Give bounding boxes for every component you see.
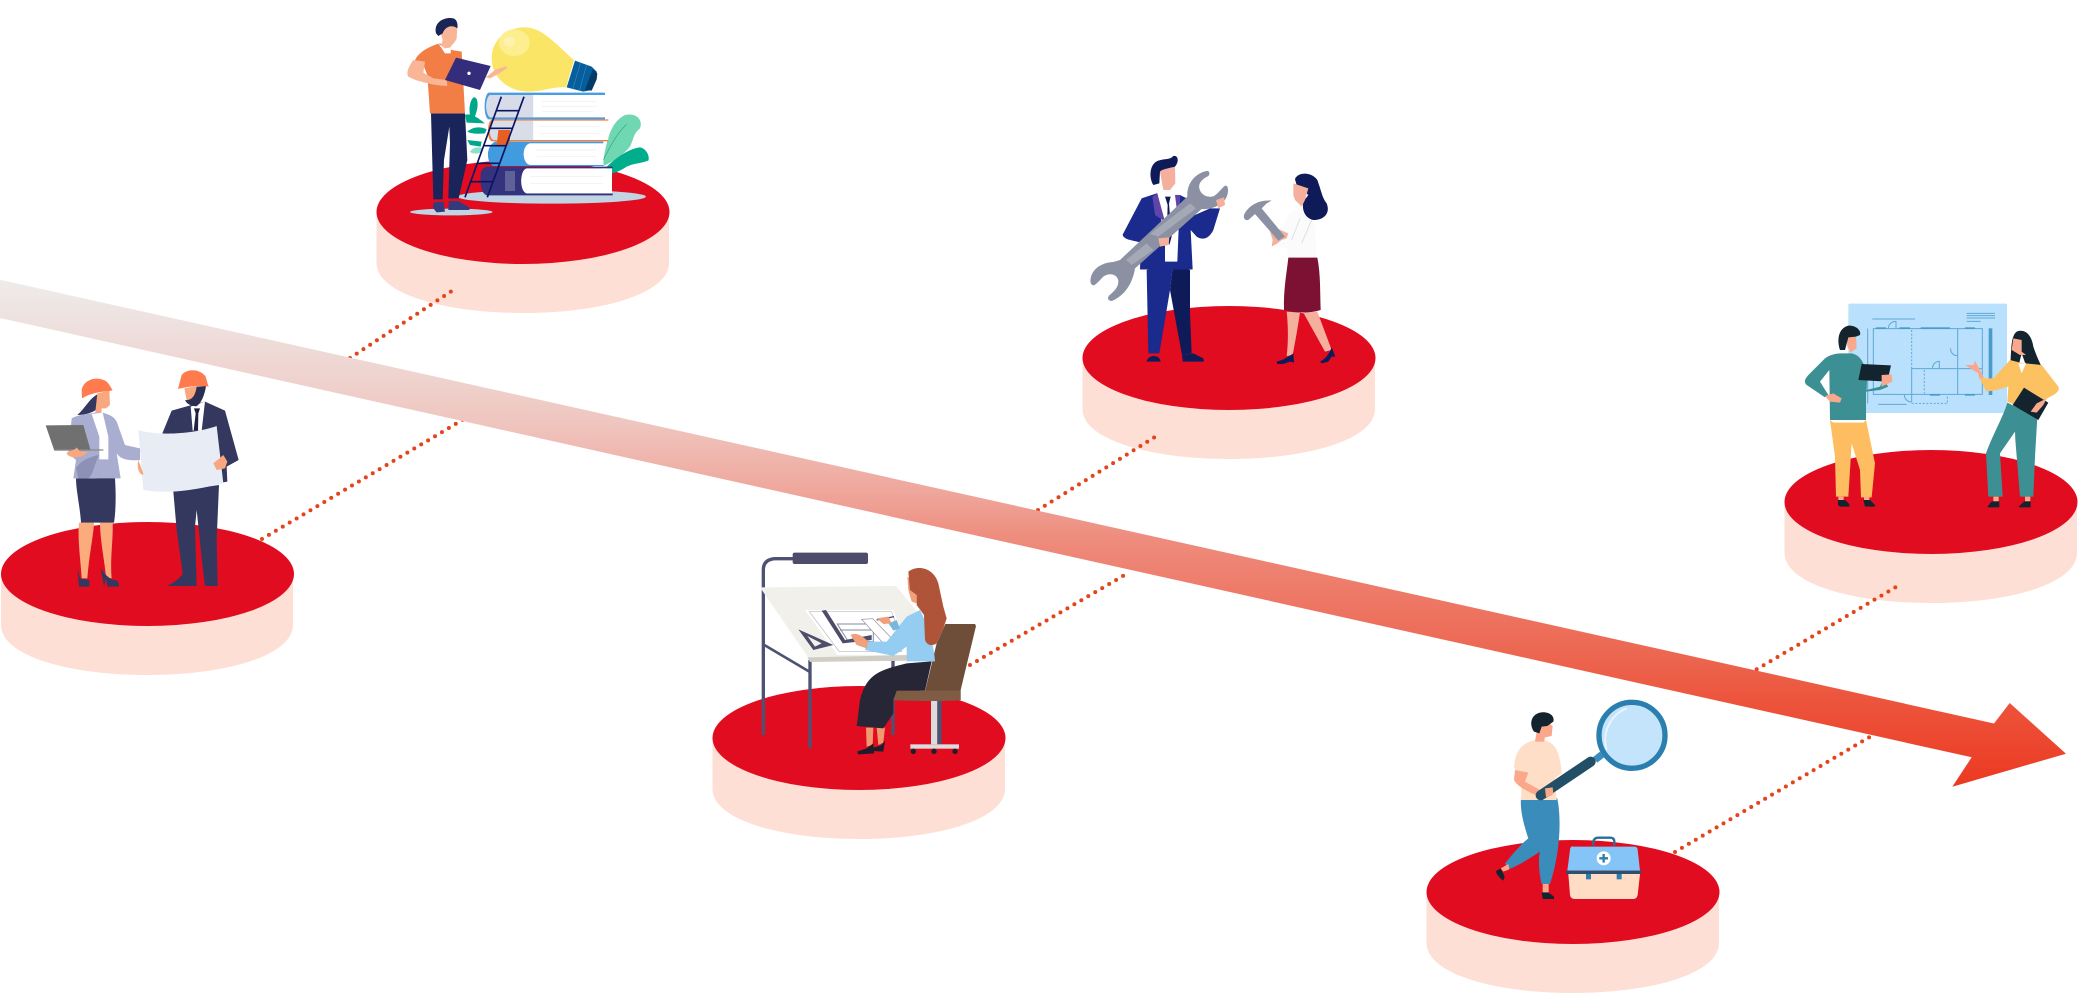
illustration: two engineers with blueprint — [46, 370, 239, 587]
platform disc 6 — [1784, 450, 2078, 603]
illustration: two workers with wrench and hammer — [1090, 156, 1335, 364]
illustration: man with laptop, books and light bulb — [407, 18, 649, 215]
illustration: two architects with floor plan board — [1805, 304, 2059, 507]
timeline arrow — [0, 280, 2066, 787]
dotted connector lines — [262, 288, 1901, 852]
platform disc 2 — [376, 160, 670, 313]
platform disc 5 — [1426, 840, 1720, 993]
platform disc 4 — [712, 686, 1006, 839]
platform disc 1 — [1, 522, 294, 675]
platform disc 3 — [1082, 306, 1376, 459]
illustration: woman at drafting table — [760, 553, 976, 754]
illustration: man with magnifying glass and toolbox — [1496, 702, 1665, 899]
